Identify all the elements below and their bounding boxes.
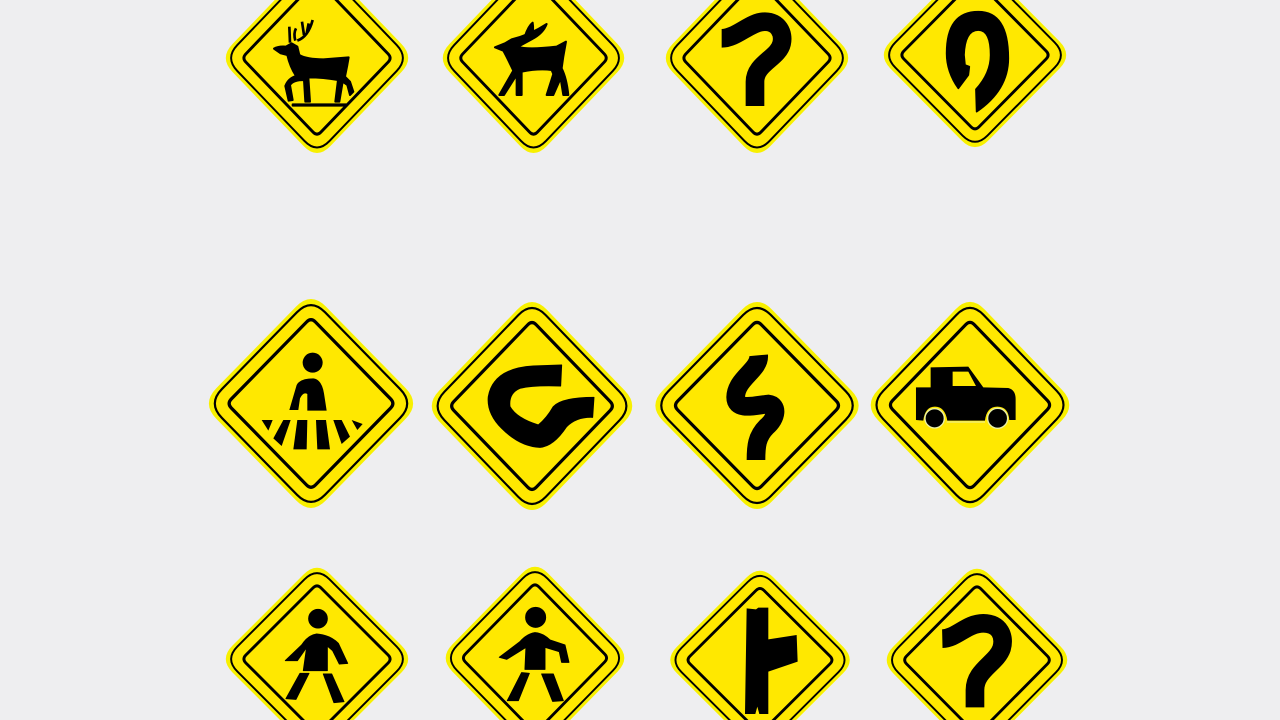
sign: sharp curve — [666, 0, 848, 153]
sign plate — [887, 569, 1067, 720]
icon: hairpin road — [947, 12, 1008, 112]
sign plate — [655, 302, 859, 509]
sign: curve right — [887, 569, 1067, 720]
icon: walking person — [285, 609, 348, 703]
sign: winding road bend — [432, 302, 632, 510]
sign: pedestrian — [226, 568, 408, 720]
sign plate — [209, 299, 413, 508]
sign: deer standing — [226, 0, 408, 153]
sign plate — [871, 302, 1069, 508]
sign plate — [884, 0, 1066, 147]
sign: truck — [871, 302, 1069, 508]
icon: walking person with arm out — [499, 607, 569, 701]
sign plate — [226, 0, 408, 153]
icon: person on crosswalk — [262, 353, 363, 449]
sign plate — [670, 571, 850, 720]
icon: curve arrow road — [942, 623, 1003, 707]
sign: hairpin turn — [884, 0, 1066, 147]
sign: pedestrian walking — [446, 567, 624, 720]
icon: side road — [745, 608, 798, 714]
sign: pedestrian crossing — [209, 299, 413, 508]
icon: leaping deer — [495, 23, 568, 95]
sign: deer leaping — [443, 0, 624, 153]
icon: s-curve road — [736, 355, 775, 460]
icon: curve arrow road — [722, 22, 782, 106]
sign: side road junction — [670, 571, 850, 720]
icon: standing deer with ground line — [274, 20, 353, 106]
sign plate — [446, 567, 624, 720]
icon: pickup truck — [916, 367, 1016, 428]
sign plate — [226, 568, 408, 720]
sign plate — [666, 0, 848, 153]
sign plate — [443, 0, 624, 153]
sign plate — [432, 302, 632, 510]
icon: winding road — [488, 365, 594, 447]
sign: winding s-curve — [655, 302, 859, 509]
